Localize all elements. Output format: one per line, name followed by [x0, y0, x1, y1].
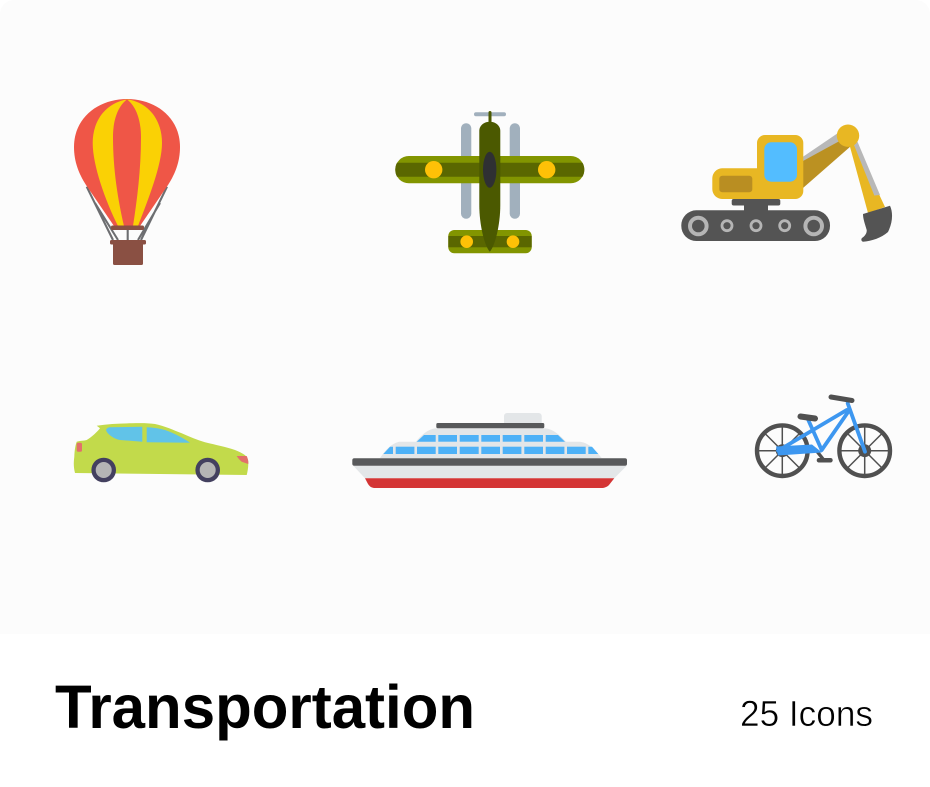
icon: green hatchback car — [74, 423, 248, 482]
icon: propeller plane — [395, 111, 584, 253]
title: Transportation — [55, 673, 475, 741]
icon: excavator — [681, 124, 892, 242]
icon: blue bicycle — [756, 397, 890, 476]
icon: hot air balloon — [74, 99, 180, 265]
icon count: 25 Icons — [740, 693, 873, 734]
icon: cruise ship — [352, 413, 627, 488]
